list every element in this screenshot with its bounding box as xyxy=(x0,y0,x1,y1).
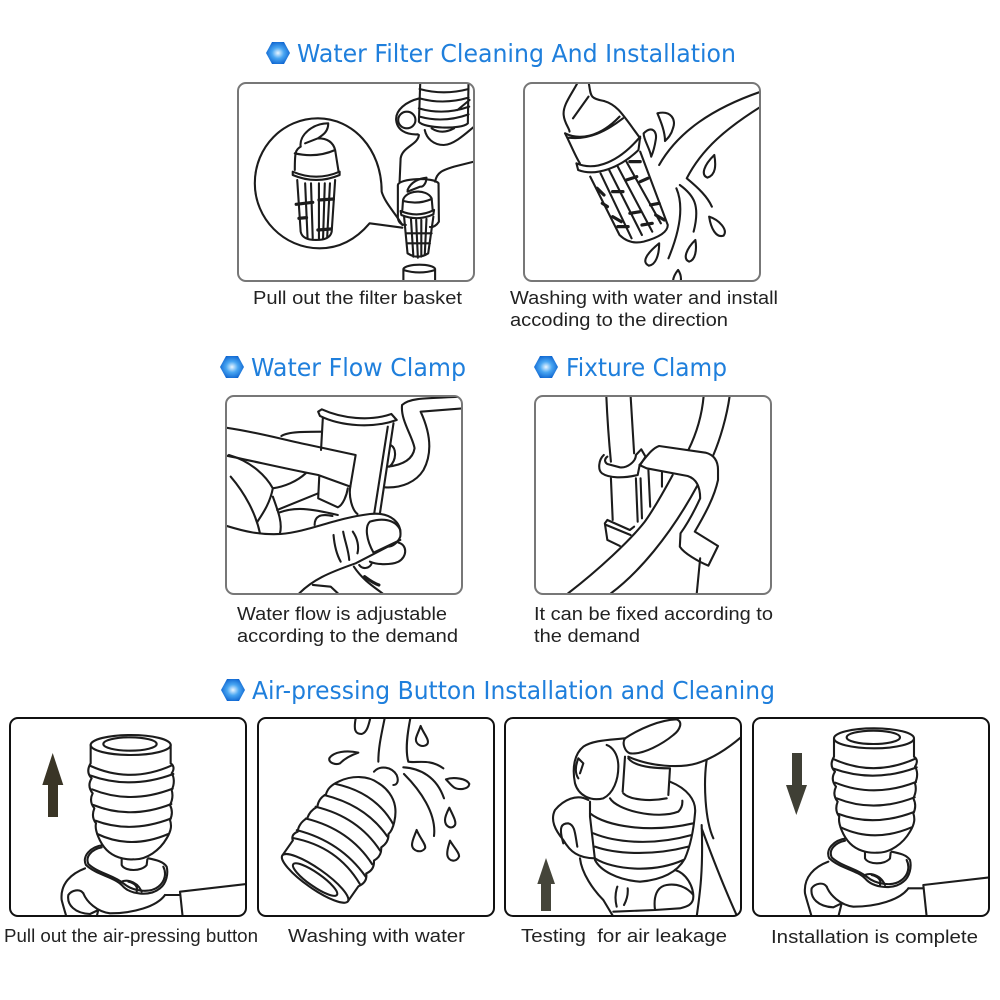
heading text: Water Flow Clamp xyxy=(251,353,466,382)
caption: fixed according to demand xyxy=(534,604,773,646)
water stream xyxy=(378,717,444,836)
icon: blue hexagon xyxy=(266,42,290,64)
caption: pull out filter basket: Pull out the filter basket xyxy=(253,288,462,308)
large clip xyxy=(639,446,718,566)
tilted bellows button xyxy=(280,776,397,904)
caption: installation complete: Installation is complete xyxy=(771,927,978,947)
filter basket held by fingers xyxy=(564,82,668,242)
icon: blue hexagon xyxy=(221,679,245,701)
panel: fixture clamp xyxy=(535,395,771,595)
hose xyxy=(568,475,698,593)
clamp body xyxy=(318,409,397,514)
fingers on top xyxy=(574,719,742,799)
water drops xyxy=(329,717,469,861)
pressed bellows xyxy=(590,757,695,882)
vertical pipe xyxy=(606,395,662,522)
caption: fixed according to demand: It can be fixed according to xyxy=(534,604,773,624)
caption: water flow adjustable: Water flow is adjustable xyxy=(237,604,447,624)
lower hand xyxy=(553,760,737,917)
heading text: Air-pressing Button Installation and Cleaning xyxy=(252,676,775,705)
bellows button xyxy=(88,735,174,859)
hand and fingers xyxy=(224,427,405,593)
panel: washing the button xyxy=(258,717,494,916)
pipe clip xyxy=(599,449,646,477)
panel: installation complete xyxy=(753,718,990,917)
caption: washing with water: accoding to the direction xyxy=(510,310,728,330)
heading: water flow clamp xyxy=(220,353,466,382)
arrow up xyxy=(42,753,63,817)
caption: pull out air-pressing button: Pull out the air-pressing button xyxy=(4,926,258,946)
caption: water flow adjustable: according to the demand xyxy=(237,626,458,646)
heading: air-pressing button xyxy=(221,676,775,705)
lower cylinder xyxy=(403,265,435,283)
caption: water flow adjustable xyxy=(237,604,458,646)
caption: washing with water: Washing with water and install xyxy=(510,288,778,308)
button base xyxy=(60,844,245,915)
icon: blue hexagon xyxy=(220,356,244,378)
arrow up xyxy=(537,858,555,911)
lower collar xyxy=(605,520,634,546)
heading: fixture clamp xyxy=(534,353,727,382)
panel: testing for air leakage xyxy=(505,718,742,917)
zoom callout circle xyxy=(255,118,402,248)
caption: fixed according to demand: the demand xyxy=(534,626,640,646)
heading text: Fixture Clamp xyxy=(566,353,727,382)
panel: pull out the filter basket xyxy=(238,82,474,283)
caption: washing with water: Washing with water xyxy=(288,926,465,946)
panel: washing the filter basket xyxy=(524,82,761,288)
panel: water flow clamp xyxy=(224,396,463,594)
icon: blue hexagon xyxy=(534,356,558,378)
small filter basket in cup xyxy=(398,178,439,258)
nipple xyxy=(374,768,398,785)
faucet with bellows and ring xyxy=(396,82,474,182)
arrow down xyxy=(786,753,807,815)
panel: pull out air-pressing button xyxy=(10,718,247,923)
heading text: Water Filter Cleaning And Installation xyxy=(297,39,736,68)
water drops xyxy=(644,113,725,288)
caption: testing for air leakage: Testing for air leakage xyxy=(521,926,727,946)
bellows button xyxy=(832,728,917,853)
back tube xyxy=(688,395,730,595)
water stream xyxy=(659,92,761,258)
button base xyxy=(805,838,990,917)
caption: washing with water xyxy=(510,288,778,330)
enlarged filter basket xyxy=(293,123,340,240)
title: water filter cleaning xyxy=(266,39,736,68)
tube xyxy=(385,397,463,487)
